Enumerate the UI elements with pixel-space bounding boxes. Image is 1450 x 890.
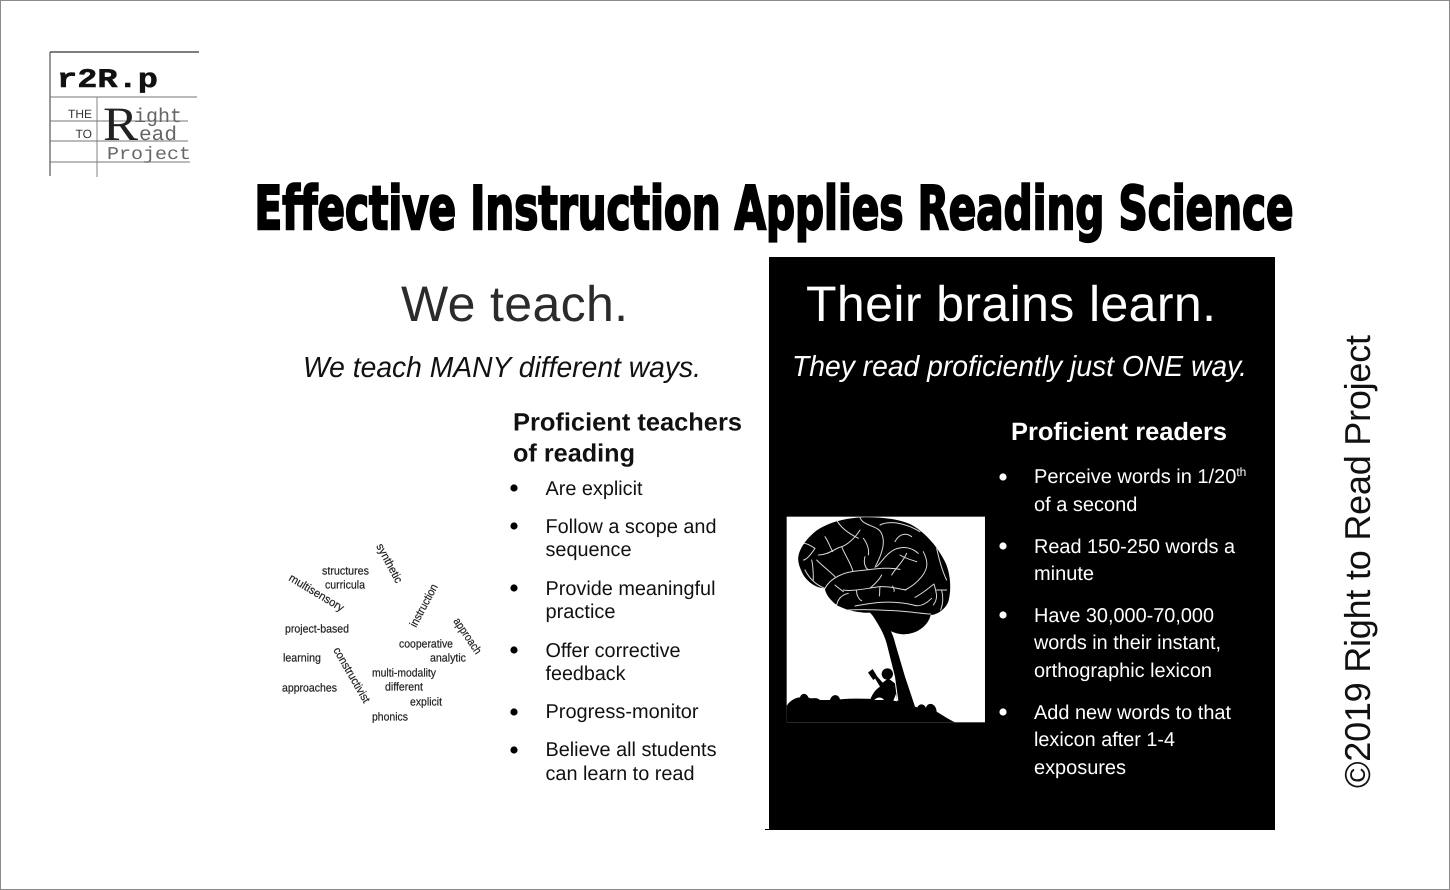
word cloud: curricula <box>325 580 366 592</box>
logo: r2R.p The Right to Read Project: ead <box>139 124 177 147</box>
bullet list: readers: of a second <box>1034 494 1137 516</box>
bullet list: teachers: Progress-monitor <box>546 701 699 723</box>
panel: their brains learn <box>765 257 1275 830</box>
trunk <box>871 613 915 707</box>
heading: their brains learn: Their brains learn. <box>806 276 1216 332</box>
panel: we teach <box>282 276 742 785</box>
logo: r2R.p The Right to Read Project: TO <box>76 127 92 141</box>
logo: r2R.p The Right to Read Project: THE <box>68 107 92 121</box>
bullet list: readers: orthographic lexicon <box>1034 660 1212 682</box>
list heading: proficient teachers <box>513 408 742 468</box>
bullet list: readers: Perceive words in 1/20 <box>1034 466 1236 488</box>
subheading: many ways: We teach MANY different ways. <box>303 352 701 384</box>
bullet list: teachers: Provide meaningful <box>546 578 716 600</box>
brain folds <box>803 517 947 614</box>
logo: r2R.p The Right to Read Project: r2R.p <box>57 66 158 96</box>
bullet list: teachers: Follow a scope and <box>546 516 716 538</box>
word cloud: project-based <box>285 624 349 636</box>
logo: r2R.p The Right to Read Project <box>50 52 199 177</box>
bullet list: readers <box>999 465 1246 779</box>
logo: r2R.p The Right to Read Project: Project <box>107 145 191 165</box>
word cloud: constructivist <box>330 646 372 706</box>
word cloud <box>282 542 483 724</box>
bullet list: readers: th <box>1236 465 1246 479</box>
bullet list: readers: Have 30,000-70,000 <box>1034 605 1214 627</box>
child reading <box>868 668 897 702</box>
word cloud: phonics <box>372 712 408 724</box>
heading: we teach: We teach. <box>401 276 628 332</box>
word cloud: multi-modality <box>372 668 436 680</box>
brain silhouette <box>798 517 950 634</box>
bullet list: teachers: sequence <box>546 539 632 561</box>
word cloud: synthetic <box>373 542 404 586</box>
bullet list: readers: lexicon after 1-4 <box>1034 729 1175 751</box>
bullet list: teachers: practice <box>546 601 616 623</box>
bullet list: readers: Add new words to that <box>1034 702 1231 724</box>
image: brain tree with child reading <box>787 517 985 722</box>
bullet list: teachers: feedback <box>546 663 626 685</box>
word cloud: analytic <box>430 652 466 664</box>
word cloud: multisensory <box>286 572 346 615</box>
word cloud: learning <box>283 652 321 664</box>
bullet list: readers: exposures <box>1034 757 1126 779</box>
word cloud: different <box>385 682 424 694</box>
copyright, rotated: ©2019 Right to Read Project <box>1337 335 1378 788</box>
word cloud: explicit <box>410 696 443 708</box>
ground <box>787 694 955 722</box>
bullet list: readers: words in their instant, <box>1033 632 1221 654</box>
word cloud: structures <box>322 566 369 578</box>
list heading: proficient readers: Proficient readers <box>1011 418 1227 446</box>
list heading: proficient teachers: Proficient teachers <box>513 408 742 436</box>
list heading: proficient teachers: of reading <box>513 440 635 468</box>
bullet list: teachers: can learn to read <box>546 763 694 785</box>
bullet list: teachers <box>510 478 716 785</box>
word cloud: approach <box>451 616 483 657</box>
bullet list: readers: minute <box>1034 563 1094 585</box>
bullet list: teachers: Are explicit <box>546 478 643 500</box>
bullet list: teachers: Believe all students <box>546 739 716 761</box>
word cloud: approaches <box>282 682 337 694</box>
word cloud: instruction <box>408 582 441 629</box>
logo: r2R.p The Right to Read Project: R <box>103 98 138 151</box>
subheading: one way: They read proficiently just ONE way. <box>792 351 1247 383</box>
bullet list: readers: Read 150-250 words a <box>1034 536 1236 558</box>
logo: r2R.p The Right to Read Project: ight <box>134 106 182 129</box>
word cloud: cooperative <box>399 638 453 650</box>
bullet list: teachers: Offer corrective <box>546 640 680 662</box>
